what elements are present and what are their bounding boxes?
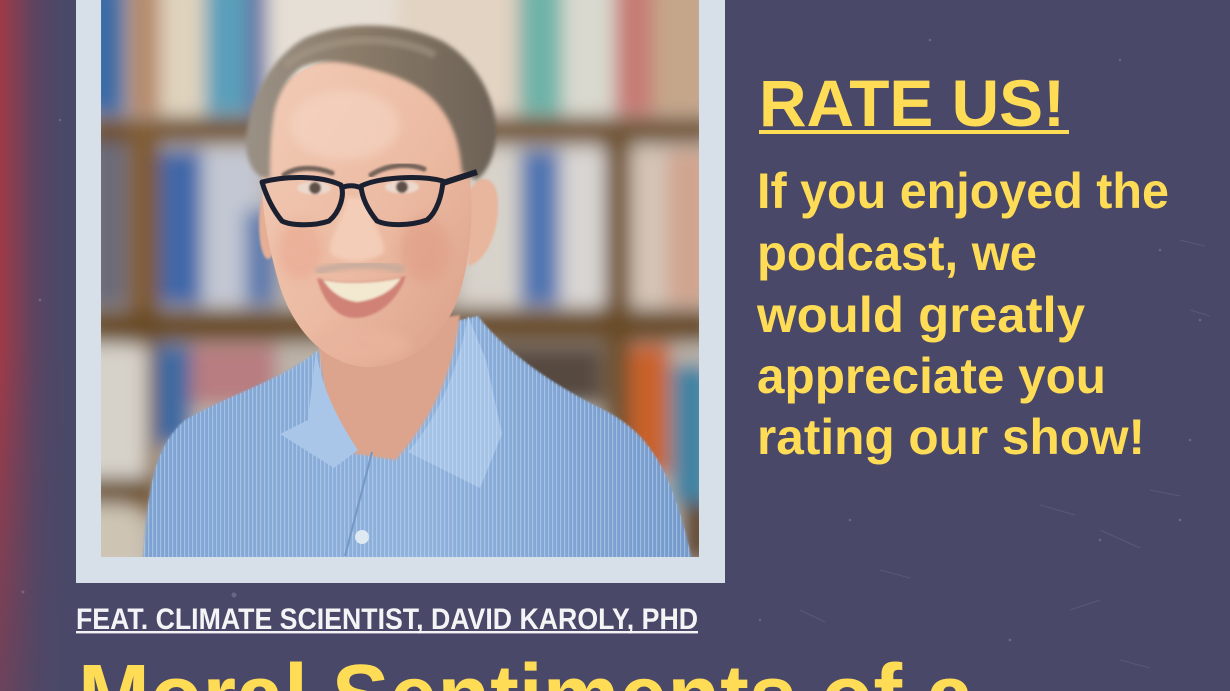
ears: [259, 179, 498, 266]
guest credit: FEAT. CLIMATE SCIENTIST, DAVID KAROLY, PHD: [76, 603, 698, 636]
collar: [280, 316, 502, 556]
shirt: [143, 316, 692, 560]
nose: [330, 198, 384, 261]
bookshelf background: [85, 0, 715, 570]
text block: rate us message: [756, 163, 1169, 465]
text block: rate us message: would greatly: [756, 287, 1085, 343]
photo frame: [76, 0, 725, 583]
text block: rate us message: If you enjoyed the: [757, 163, 1169, 219]
shirt button: [355, 530, 369, 544]
hair highlights: [285, 40, 435, 66]
stubble shade: [316, 265, 404, 272]
neck: [318, 315, 460, 460]
eyebrows: [284, 165, 424, 175]
photo: portrait of David Karoly: [85, 0, 715, 570]
mouth: [317, 276, 406, 318]
text block: rate us message: podcast, we: [757, 225, 1037, 281]
face: [262, 60, 472, 367]
heading: rate us: RATE US!: [759, 66, 1065, 140]
text block: rate us message: appreciate you: [757, 348, 1106, 404]
eyes: [297, 180, 419, 194]
hair: [246, 25, 496, 180]
glasses: [262, 172, 477, 225]
text block: rate us message: rating our show!: [757, 409, 1145, 465]
